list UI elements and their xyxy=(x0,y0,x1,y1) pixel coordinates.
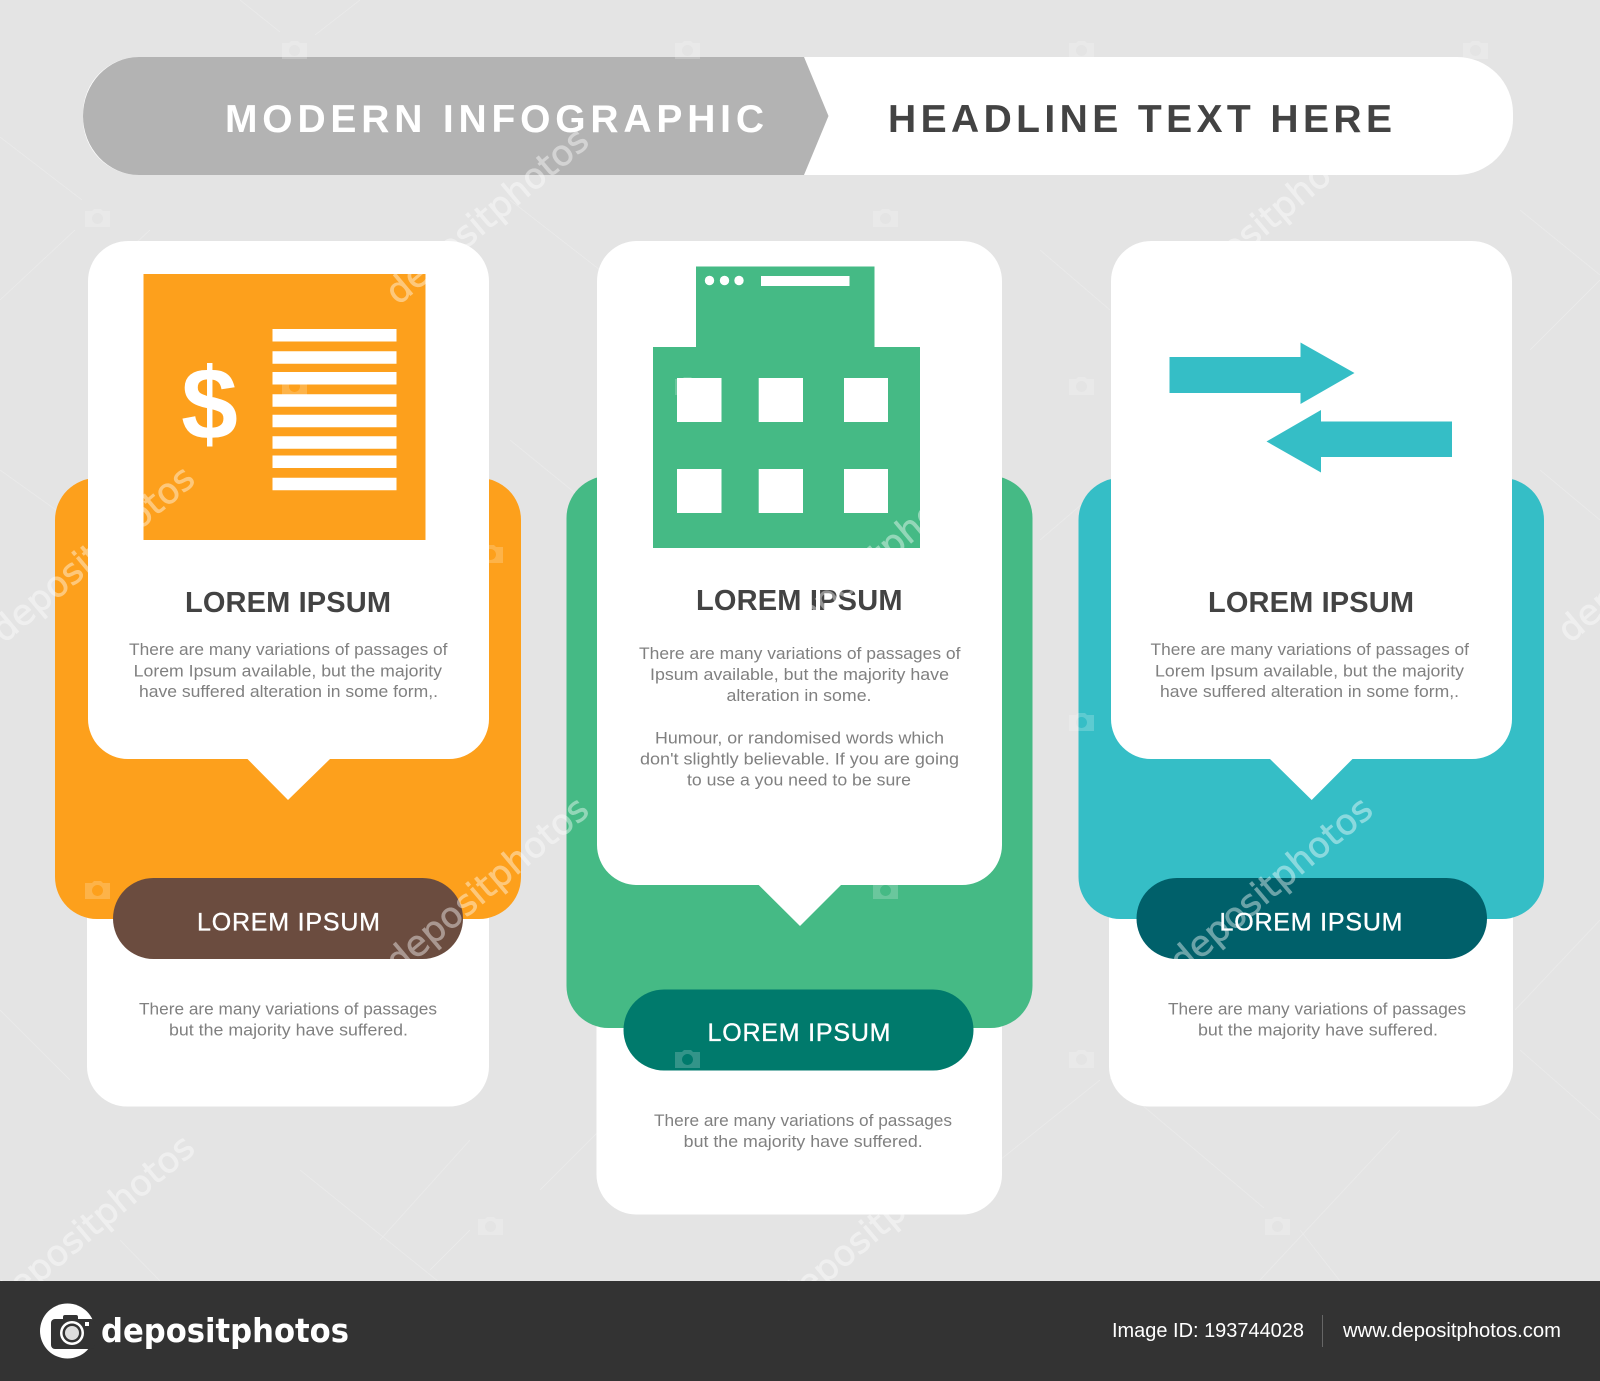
card heading: LOREM IPSUM xyxy=(1208,587,1414,619)
watermark overlay: depositphotos xyxy=(771,458,990,651)
card body text xyxy=(1150,641,1469,701)
card body text: alteration in some. xyxy=(726,687,872,705)
card body text: have suffered alteration in some form,. xyxy=(139,683,438,701)
icon: invoice with dollar sign: $ xyxy=(181,347,238,461)
watermark overlay: depositphotos xyxy=(1162,789,1381,982)
logo wordmark: depositphotos xyxy=(101,1311,349,1350)
watermark overlay: depositphotos xyxy=(378,789,597,982)
watermark overlay: depositphotos xyxy=(378,120,597,313)
lower caption: but the majority have suffered. xyxy=(169,1022,408,1040)
lower caption xyxy=(654,1112,952,1151)
panel: green card xyxy=(566,241,1032,1214)
lower caption xyxy=(139,1000,437,1040)
dark green pill label: LOREM IPSUM xyxy=(708,1019,890,1047)
speech bubble panel xyxy=(597,241,1002,926)
orange backing panel xyxy=(55,478,521,919)
icon: invoice with dollar sign xyxy=(144,274,426,540)
lower white panel xyxy=(1109,800,1513,1106)
watermark overlay: depositphotos xyxy=(771,1127,990,1320)
lower caption: There are many variations of passages xyxy=(654,1112,952,1130)
card body text: There are many variations of passages of xyxy=(639,645,961,663)
card heading: LOREM IPSUM xyxy=(185,587,391,619)
lower caption: but the majority have suffered. xyxy=(1198,1022,1438,1040)
card body text: Lorem Ipsum available, but the majority xyxy=(134,662,443,680)
lower caption xyxy=(1168,1000,1466,1040)
card body text: have suffered alteration in some form,. xyxy=(1160,683,1459,701)
icon: exchange arrows xyxy=(1170,342,1452,472)
card body text: don't slightly believable. If you are going xyxy=(640,750,959,768)
card body text: There are many variations of passages of xyxy=(1150,641,1469,659)
card body text xyxy=(129,641,448,701)
website url: www.depositphotos.com xyxy=(1342,1319,1561,1342)
lower white panel xyxy=(596,900,1002,1214)
header title right: HEADLINE TEXT HERE xyxy=(888,98,1392,141)
card heading: LOREM IPSUM xyxy=(696,585,902,617)
lower caption: There are many variations of passages xyxy=(1168,1000,1466,1018)
card body text: There are many variations of passages of xyxy=(129,641,448,659)
card body text xyxy=(639,645,961,790)
watermark overlay: depositphotos xyxy=(1162,120,1381,313)
icon: office building xyxy=(653,266,920,548)
lower white panel xyxy=(87,800,489,1106)
panel: orange card xyxy=(55,241,521,1106)
dark teal pill label xyxy=(1136,878,1487,959)
lower caption: but the majority have suffered. xyxy=(684,1133,923,1151)
brown pill label xyxy=(113,878,463,959)
card body text: Lorem Ipsum available, but the majority xyxy=(1155,662,1465,680)
card body text: Ipsum available, but the majority have xyxy=(650,666,949,684)
dark teal pill label: LOREM IPSUM xyxy=(1220,908,1402,936)
panel: teal card xyxy=(1078,241,1544,1106)
lower caption: There are many variations of passages xyxy=(139,1000,437,1018)
green backing panel xyxy=(566,476,1032,1028)
header title left: MODERN INFOGRAPHIC xyxy=(225,98,764,141)
footer bar xyxy=(0,1281,1600,1381)
speech bubble panel xyxy=(88,241,489,800)
icon: camera logo xyxy=(40,1304,95,1358)
header left grey arrow xyxy=(83,57,828,175)
dark green pill label xyxy=(624,990,974,1070)
teal backing panel xyxy=(1078,478,1544,919)
header banner xyxy=(83,57,1513,175)
card body text: to use a you need to be sure xyxy=(687,772,911,790)
brown pill label: LOREM IPSUM xyxy=(197,908,380,936)
card body text: Humour, or randomised words which xyxy=(655,730,944,748)
image id: Image ID: 193744028 xyxy=(1112,1319,1304,1342)
header right white pill xyxy=(83,57,1513,175)
watermark camera marks xyxy=(85,41,1488,1235)
speech bubble panel xyxy=(1111,241,1512,800)
